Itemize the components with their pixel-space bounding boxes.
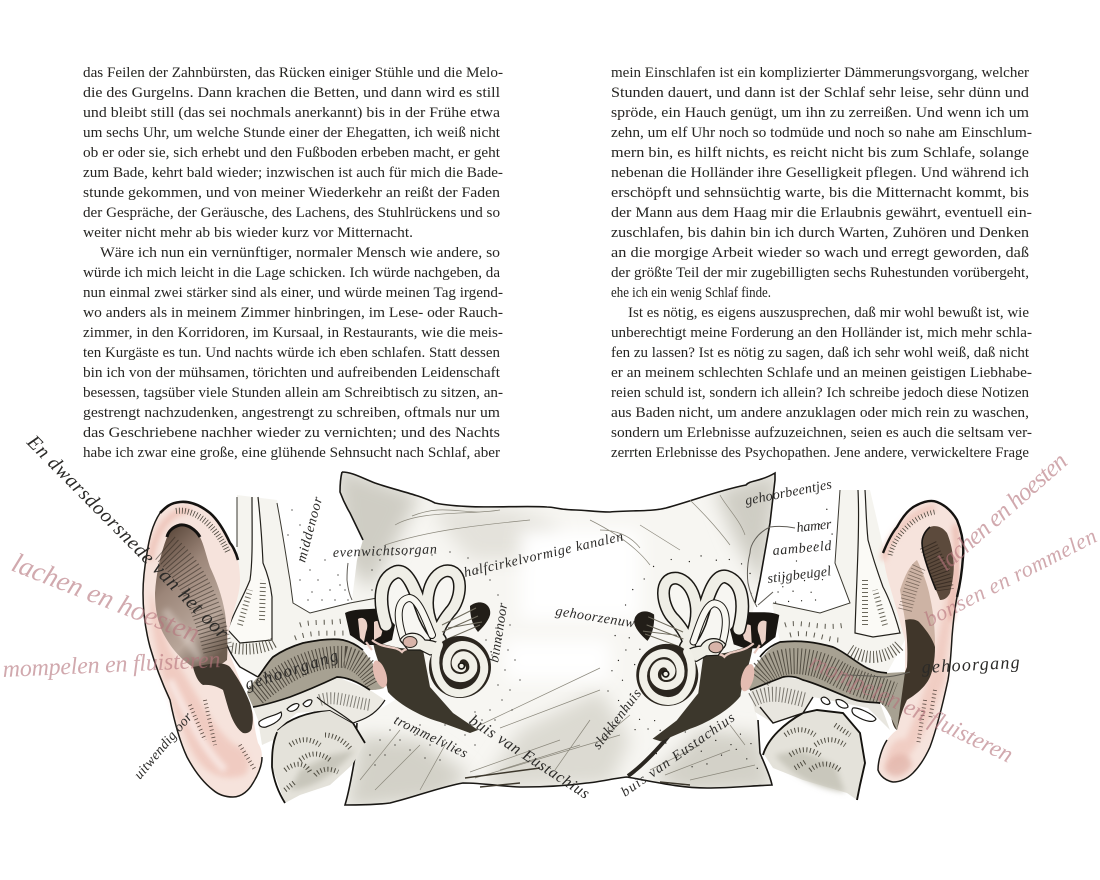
pink sound words <box>2 448 1100 768</box>
text block: left column: der Gespräche, der Geräusche, des Lachens, des Stuhlrückens und so <box>83 205 500 221</box>
anatomy labels: middenoor <box>294 495 326 564</box>
lower bone <box>763 710 865 800</box>
ossicles <box>358 618 382 642</box>
anatomy labels: uitwendig oor <box>132 710 196 783</box>
text block: right column <box>611 65 1032 461</box>
text block: right column: Stunden dauert, und dann ist der Schlaf sehr leise, sehr dünn und <box>611 85 1030 101</box>
auditory nerve <box>470 602 490 632</box>
ear canal <box>745 641 905 730</box>
text block: right column: fen zu lassen? Ist es nötig zu sagen, daß ich sehr wohl weiß, daß nicht <box>611 345 1030 361</box>
anatomy labels: hamer <box>796 517 833 536</box>
anatomy labels: gehoorzenuw <box>554 604 636 632</box>
lower bone <box>272 710 365 803</box>
text block: right column: aus Baden nicht, um andere anzuklagen oder mich rein zu waschen, <box>611 405 1029 421</box>
stipple dots <box>288 510 520 765</box>
pink sound words: mompelen en fluisteren <box>805 649 1017 768</box>
temporal bone <box>772 490 905 673</box>
text block: left column: die des Gurgelns. Dann krachen die Betten, und dann wird es still <box>83 85 500 101</box>
text block: left column: habe ich zwar eine große, eine glühende Sehnsucht nach Schlaf, aber <box>83 445 500 461</box>
text block: left column: das Feilen der Zahnbürsten, das Rücken einiger Stühle und die Melo- <box>83 65 503 81</box>
illustration: inner ear left <box>288 510 520 765</box>
text block: right column: an die morgige Arbeit wieder so wach und erregt geworden, daß <box>611 245 1029 261</box>
text block: left column: würde ich mich leicht in die Lage schicken. Ich würde nachgeben, da <box>83 265 500 281</box>
text block: left column: Wäre ich nun ein vernünftiger, normaler Mensch wie andere, so <box>100 245 500 261</box>
anatomy labels: stijgbeugel <box>767 564 832 587</box>
text block: right column: Ist es nötig, es eigens auszusprechen, daß mir wohl bewußt ist, wie <box>628 305 1029 321</box>
text block: left column: weiter nicht mehr ab bis wieder kurz vor Mitternacht. <box>83 225 413 241</box>
anatomy labels: aambeeld <box>772 539 833 559</box>
text block: right column: mein Einschlafen ist ein komplizierter Dämmerungsvorgang, welcher <box>611 65 1029 81</box>
upper bone strip <box>750 677 890 730</box>
pink sound words: lachen en hoesten <box>932 448 1073 576</box>
anatomy labels: trommelvlies <box>391 713 470 762</box>
anatomy labels: gehoorgang <box>242 646 340 694</box>
text block: left column: gestrengt nachzudenken, angestrengt zu schreiben, oftmals nur um <box>83 405 501 421</box>
text block: right column: ehe ich ein wenig Schlaf finde. <box>611 285 771 301</box>
text block: right column: spröde, ein Hauch genügt, um ihn zu zerreißen. Und wenn ich um <box>611 105 1030 121</box>
text block: left column: und bleibt still (das sei nochmals anerkannt) bis in der Frühe etwa <box>83 105 500 121</box>
concha <box>155 525 227 668</box>
upper bone strip <box>253 677 385 745</box>
Eustachian tube dark line <box>628 712 688 776</box>
text block: left column: wo anders als in meinem Zimmer hinbringen, im Lese- oder Rauch- <box>83 305 503 321</box>
semicircular canals <box>381 571 460 640</box>
text block: left column: besessen, tagsüber viele Stunden allein am Schreibtisch zu sitzen, an- <box>83 385 503 401</box>
anatomy labels: halfcirkelvormige kanalen <box>463 530 625 581</box>
anatomy labels: evenwichtsorgan <box>333 542 437 561</box>
text block: right column: mern bin, es hilft nichts, es reicht nicht bis zum Schlafe, solange <box>611 145 1029 161</box>
text block: right column: zuschlafen, bis dahin bin ich durch Warten, Zuhören und Denken <box>611 225 1030 241</box>
text block: left column <box>83 65 503 461</box>
pink sound words: mompelen en fluisteren <box>2 647 221 683</box>
text block: left column: um sechs Uhr, um welche Stunde einer der Ehegatten, ich weiß nicht <box>83 125 501 141</box>
text block: left column: ob er oder sie, sich erhebt und den Fußboden erbeben macht, er geht <box>83 145 501 161</box>
text block: left column: ten Kurgäste es tun. Und nachts würde ich eben schlafen. Statt dessen <box>83 345 501 361</box>
text block: left column: zimmer, in den Korridoren, im Kursaal, in Restaurants, wie die meis- <box>83 325 503 341</box>
text block: left column: zum Bade, kehrt bald wieder; inzwischen ist auch für mich die Bade- <box>83 165 503 181</box>
illustration: left ear <box>143 495 385 803</box>
anatomy labels <box>132 477 1020 803</box>
text block: left column: das Geschriebene nachher wieder zu vernichten; und des Nachts <box>83 425 500 441</box>
text block: right column: reien schuld ist, sondern ich allein? Ich schreibe jedoch diese Notizen <box>611 385 1030 401</box>
outer ear <box>878 501 963 782</box>
text block: right column: der größte Teil der mir zugebilligten sechs Ruhestunden vorübergeht, <box>611 265 1029 281</box>
temporal bone <box>225 495 377 677</box>
text block: right column: zerrten Erlebnisse des Psychopathen. Jene andere, verwickeltere Frage <box>611 445 1029 461</box>
cochlea <box>429 636 491 698</box>
text block: left column: nun einmal zwei stärker sind als einer, und würde meinen Tag irgend- <box>83 285 503 301</box>
anatomy labels: buis van Eustachius <box>466 712 592 803</box>
anatomy labels: buis van Eustachius <box>619 710 738 800</box>
text block: right column: unberechtigt meine Forderung an den Holländer ist, mich mehr schla- <box>611 325 1032 341</box>
leader lines <box>347 526 910 677</box>
illustration: pillow <box>335 465 780 810</box>
text block: right column: der Mann aus dem Haag mir die Erlaubnis gewährt, eventuell ein- <box>611 205 1032 221</box>
middle ear dark cavity <box>373 642 478 733</box>
text block: right column: zehn, um elf Uhr noch so todmüde und noch so nahe am Einschlum- <box>611 125 1032 141</box>
hole ovals <box>821 697 876 721</box>
vestibule <box>400 633 445 655</box>
illustration: inner ear right (mirrored) <box>599 509 844 776</box>
outer ear <box>143 502 262 797</box>
anatomy labels: gehoorbeentjes <box>744 477 834 509</box>
text block: left column: bin ich von der mühsamen, törichten und aufreibenden Leidenschaft <box>83 365 501 381</box>
pink sound words: bonsen en rommelen <box>920 523 1100 631</box>
ear canal <box>247 639 384 707</box>
anatomy labels: gehoorgang <box>921 652 1020 677</box>
text block: right column: sondern um Erlebnisse aufzuzeichnen, seien es auch die seltsam ver- <box>611 425 1032 441</box>
illustration: right ear <box>745 490 963 800</box>
anatomy labels: binnenoor <box>487 601 511 664</box>
text block: right column: er an meinem schlechten Schlafe und an meinen geistigen Liebhabe- <box>611 365 1032 381</box>
text block: right column: erschöpft und sehnsüchtig warte, bis die Mitternacht kommt, bis <box>611 185 1029 201</box>
text block: left column: stunde gekommen, und von meiner Wiederkehr an reißt der Faden <box>83 185 501 201</box>
helix outline <box>160 502 238 560</box>
hole ovals <box>259 700 312 727</box>
pink sound words: lachen en hoesten <box>7 548 204 649</box>
eardrum <box>370 659 390 689</box>
text block: right column: nebenan die Holländer ihre Geselligkeit pflegen. Und während ich <box>611 165 1030 181</box>
anatomy labels: slakkenhuis <box>590 686 645 752</box>
caption: En dwarsdoorsnede van het oor: En dwarsdoorsnede van het oor <box>22 430 233 644</box>
